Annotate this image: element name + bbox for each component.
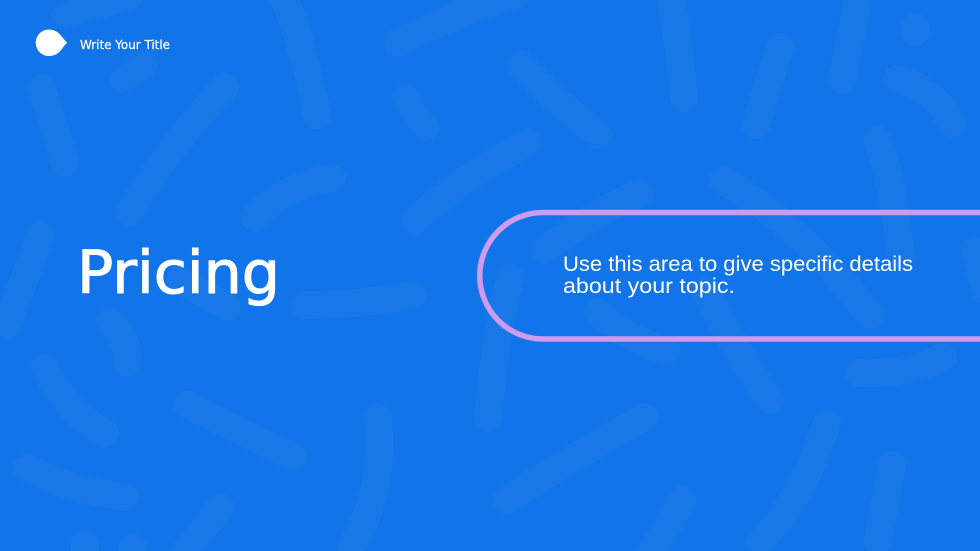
panel: pill outline [480,212,980,339]
header title: Write Your Title [80,38,170,52]
text block: details: about your topic. [563,274,735,298]
text block: details [563,252,913,298]
main heading: Pricing [77,238,280,307]
icon: logo drop [36,30,67,56]
text block: details: Use this area to give specific details [563,252,913,276]
